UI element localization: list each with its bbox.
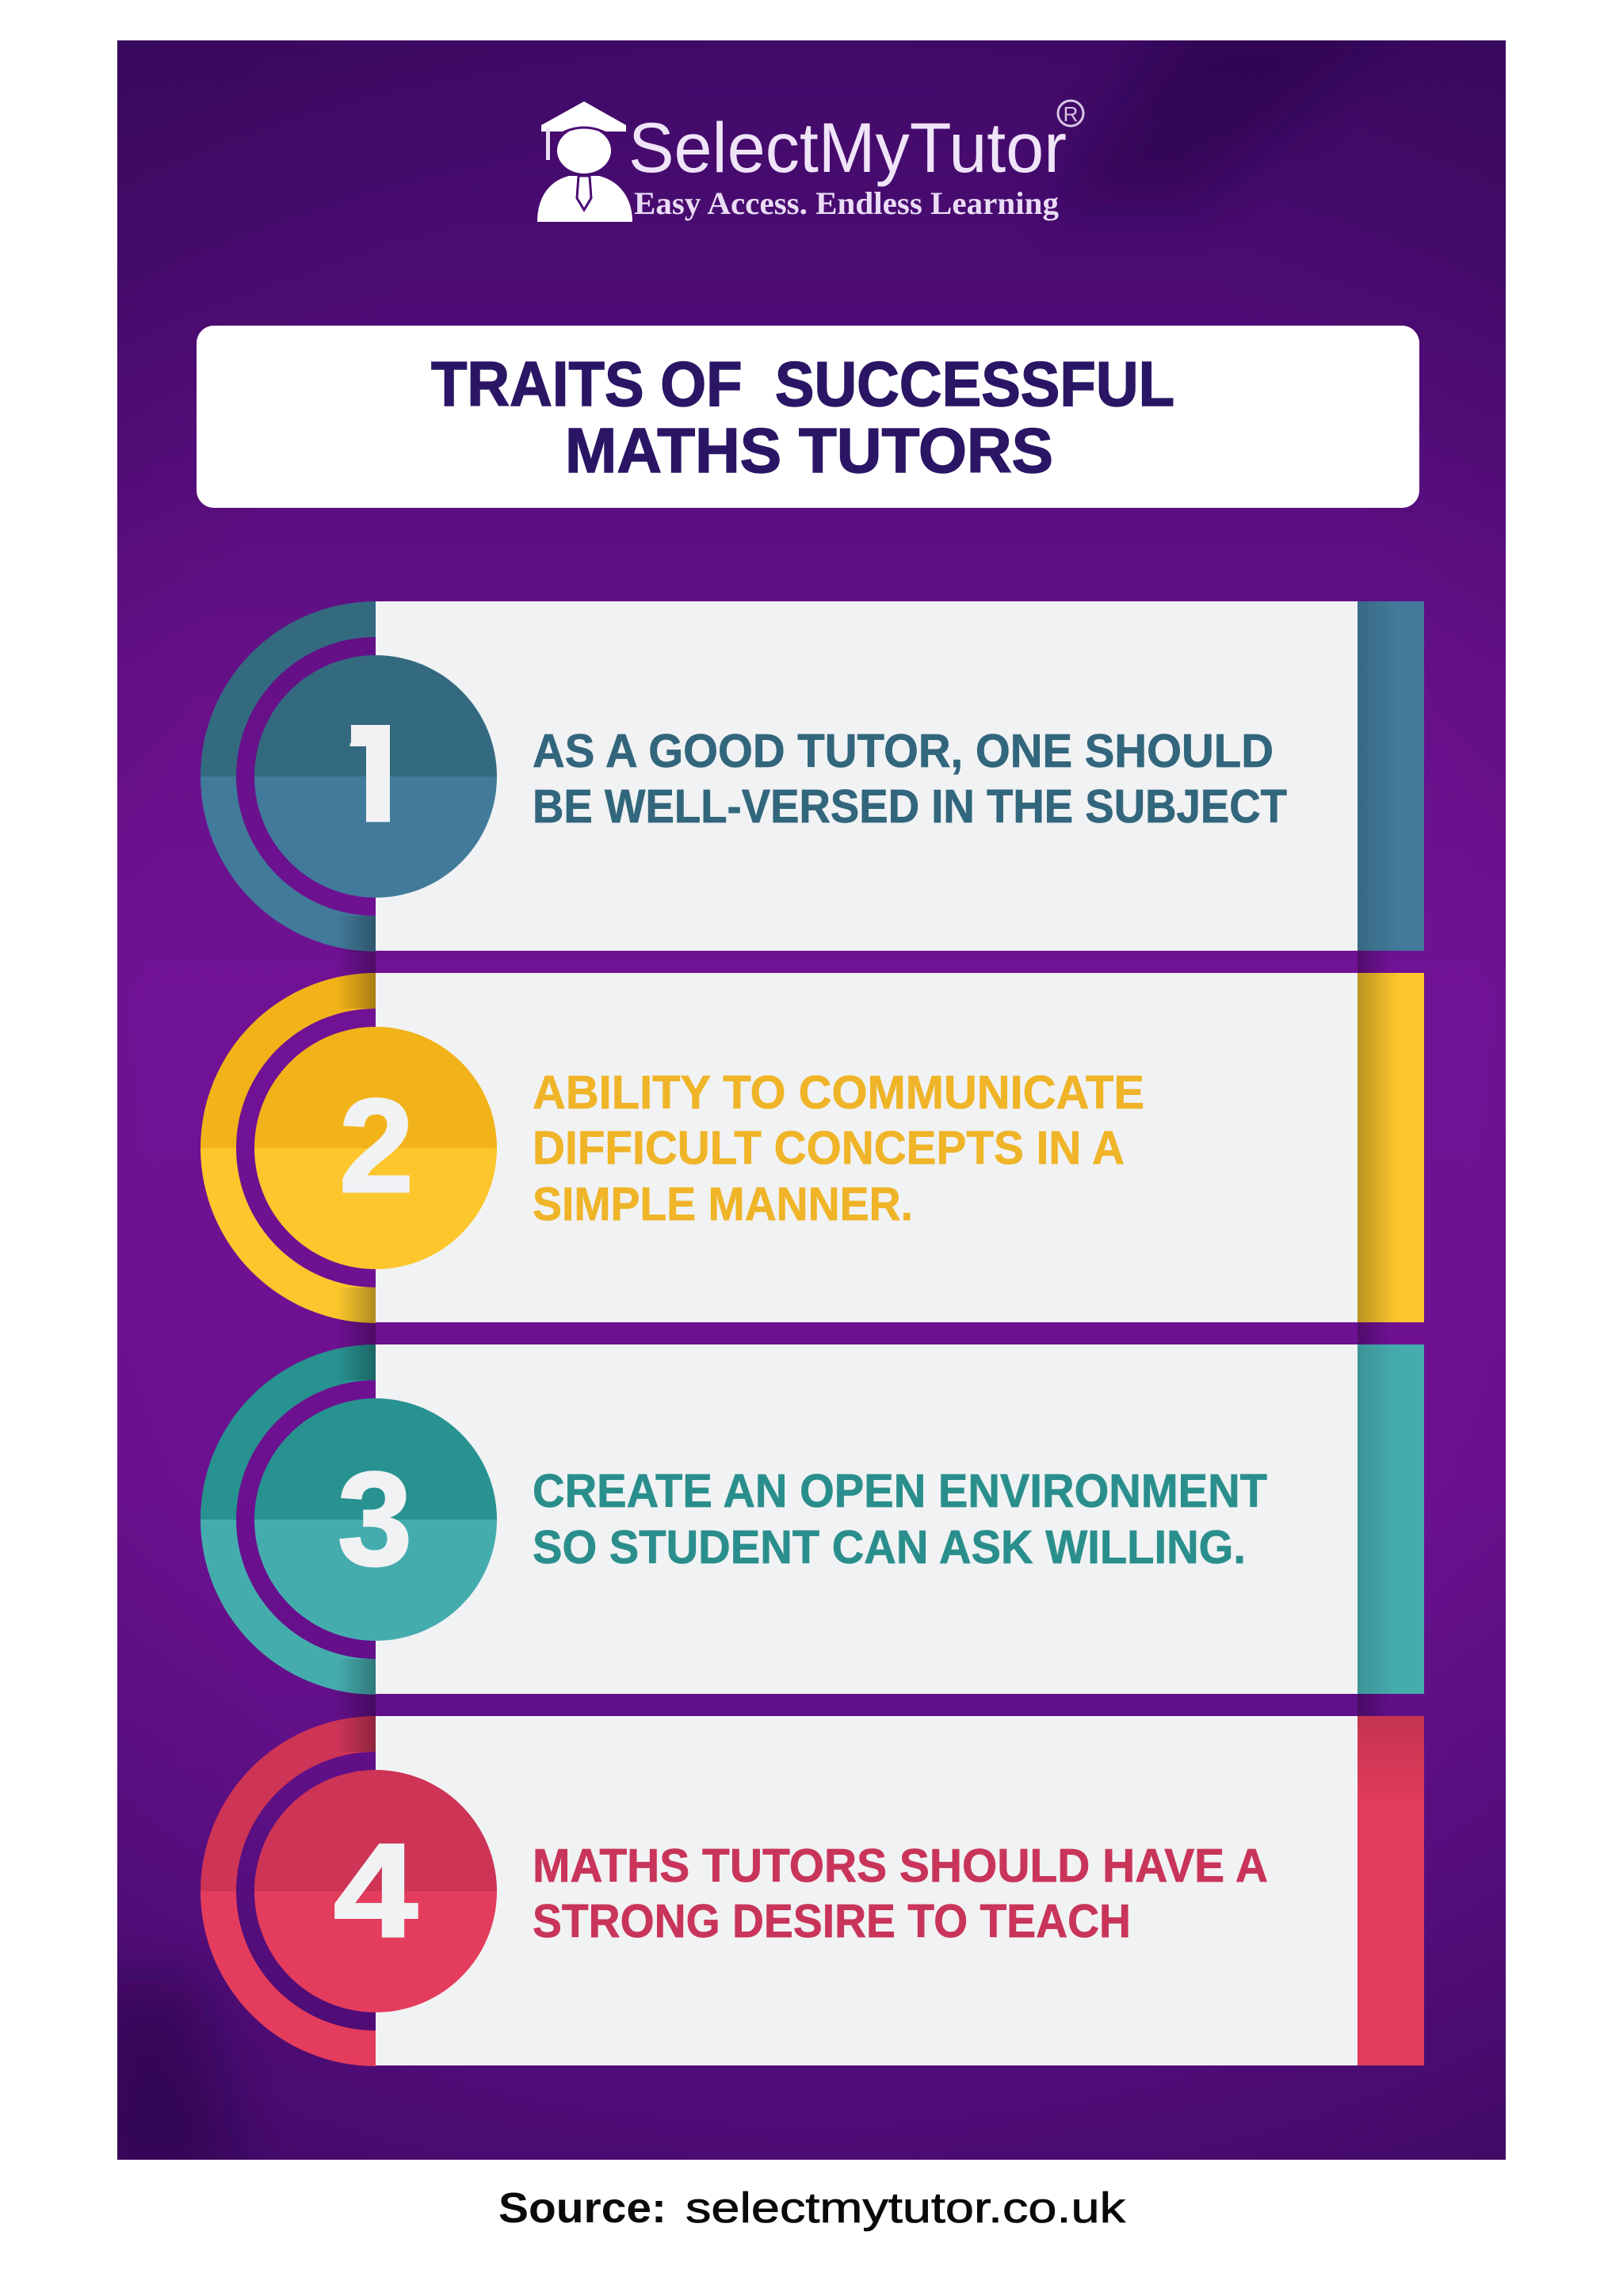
number circle (254, 1770, 497, 2012)
logo tagline: Easy Access. Endless Learning (634, 185, 1059, 221)
trait 1 text: AS A GOOD TUTOR, ONE SHOULD (533, 725, 1274, 777)
title card (197, 326, 1419, 508)
trait 3 text (533, 1465, 1267, 1573)
trait 1 text: BE WELL-VERSED IN THE SUBJECT (533, 780, 1287, 833)
trait 2 text: SIMPLE MANNER. (533, 1178, 913, 1230)
trait 2 text (533, 1066, 1144, 1230)
card body (376, 1344, 1358, 1694)
outer ring (200, 973, 376, 1323)
source line (498, 2184, 1126, 2232)
panel: trait 3 (200, 1344, 1424, 1695)
trait 2 text: ABILITY TO COMMUNICATE (533, 1066, 1144, 1119)
panel: trait 1 (200, 601, 1424, 952)
trait 3 text: SO STUDENT CAN ASK WILLING. (533, 1521, 1246, 1573)
trait 4 text: MATHS TUTORS SHOULD HAVE A (533, 1840, 1268, 1892)
number 1: 1 (342, 700, 414, 849)
number circle (254, 1398, 497, 1641)
number 4: 4 (334, 1816, 418, 1965)
number circle (254, 655, 497, 898)
title line 2: MATHS TUTORS (565, 415, 1053, 486)
card body (376, 1716, 1358, 2065)
right accent bar (1358, 1716, 1424, 2065)
panel: trait 2 (200, 973, 1424, 1323)
number 1 (350, 725, 390, 822)
number circle (254, 1027, 497, 1269)
outer ring (200, 1716, 376, 2066)
right accent bar (1358, 601, 1424, 951)
panel: trait 4 (200, 1716, 1424, 2066)
card body (376, 973, 1358, 1322)
source line: selectmytutor.co.uk (685, 2184, 1126, 2232)
outer ring (200, 601, 376, 952)
trait 4 text (533, 1840, 1268, 1947)
right accent bar (1358, 973, 1424, 1322)
number 2: 2 (339, 1071, 414, 1220)
trait 1 text (533, 725, 1287, 833)
registered mark: R (1064, 102, 1078, 126)
trait 2 text: DIFFICULT CONCEPTS IN A (533, 1122, 1125, 1174)
title line 1: TRAITS OF SUCCESSFUL (431, 349, 1174, 419)
logo: SelectMyTutor (537, 101, 1083, 222)
trait 4 text: STRONG DESIRE TO TEACH (533, 1895, 1131, 1947)
source line: Source: (498, 2184, 666, 2232)
trait 3 text: CREATE AN OPEN ENVIRONMENT (533, 1465, 1267, 1517)
number 3: 3 (338, 1444, 412, 1593)
icon: graduate tutor (537, 101, 632, 222)
outer ring (200, 1344, 376, 1695)
logo wordmark: SelectMyTutor (628, 108, 1067, 187)
card body (376, 601, 1358, 951)
registered mark (1058, 101, 1083, 126)
right accent bar (1358, 1344, 1424, 1694)
gap shadows between panels (337, 951, 1389, 1716)
